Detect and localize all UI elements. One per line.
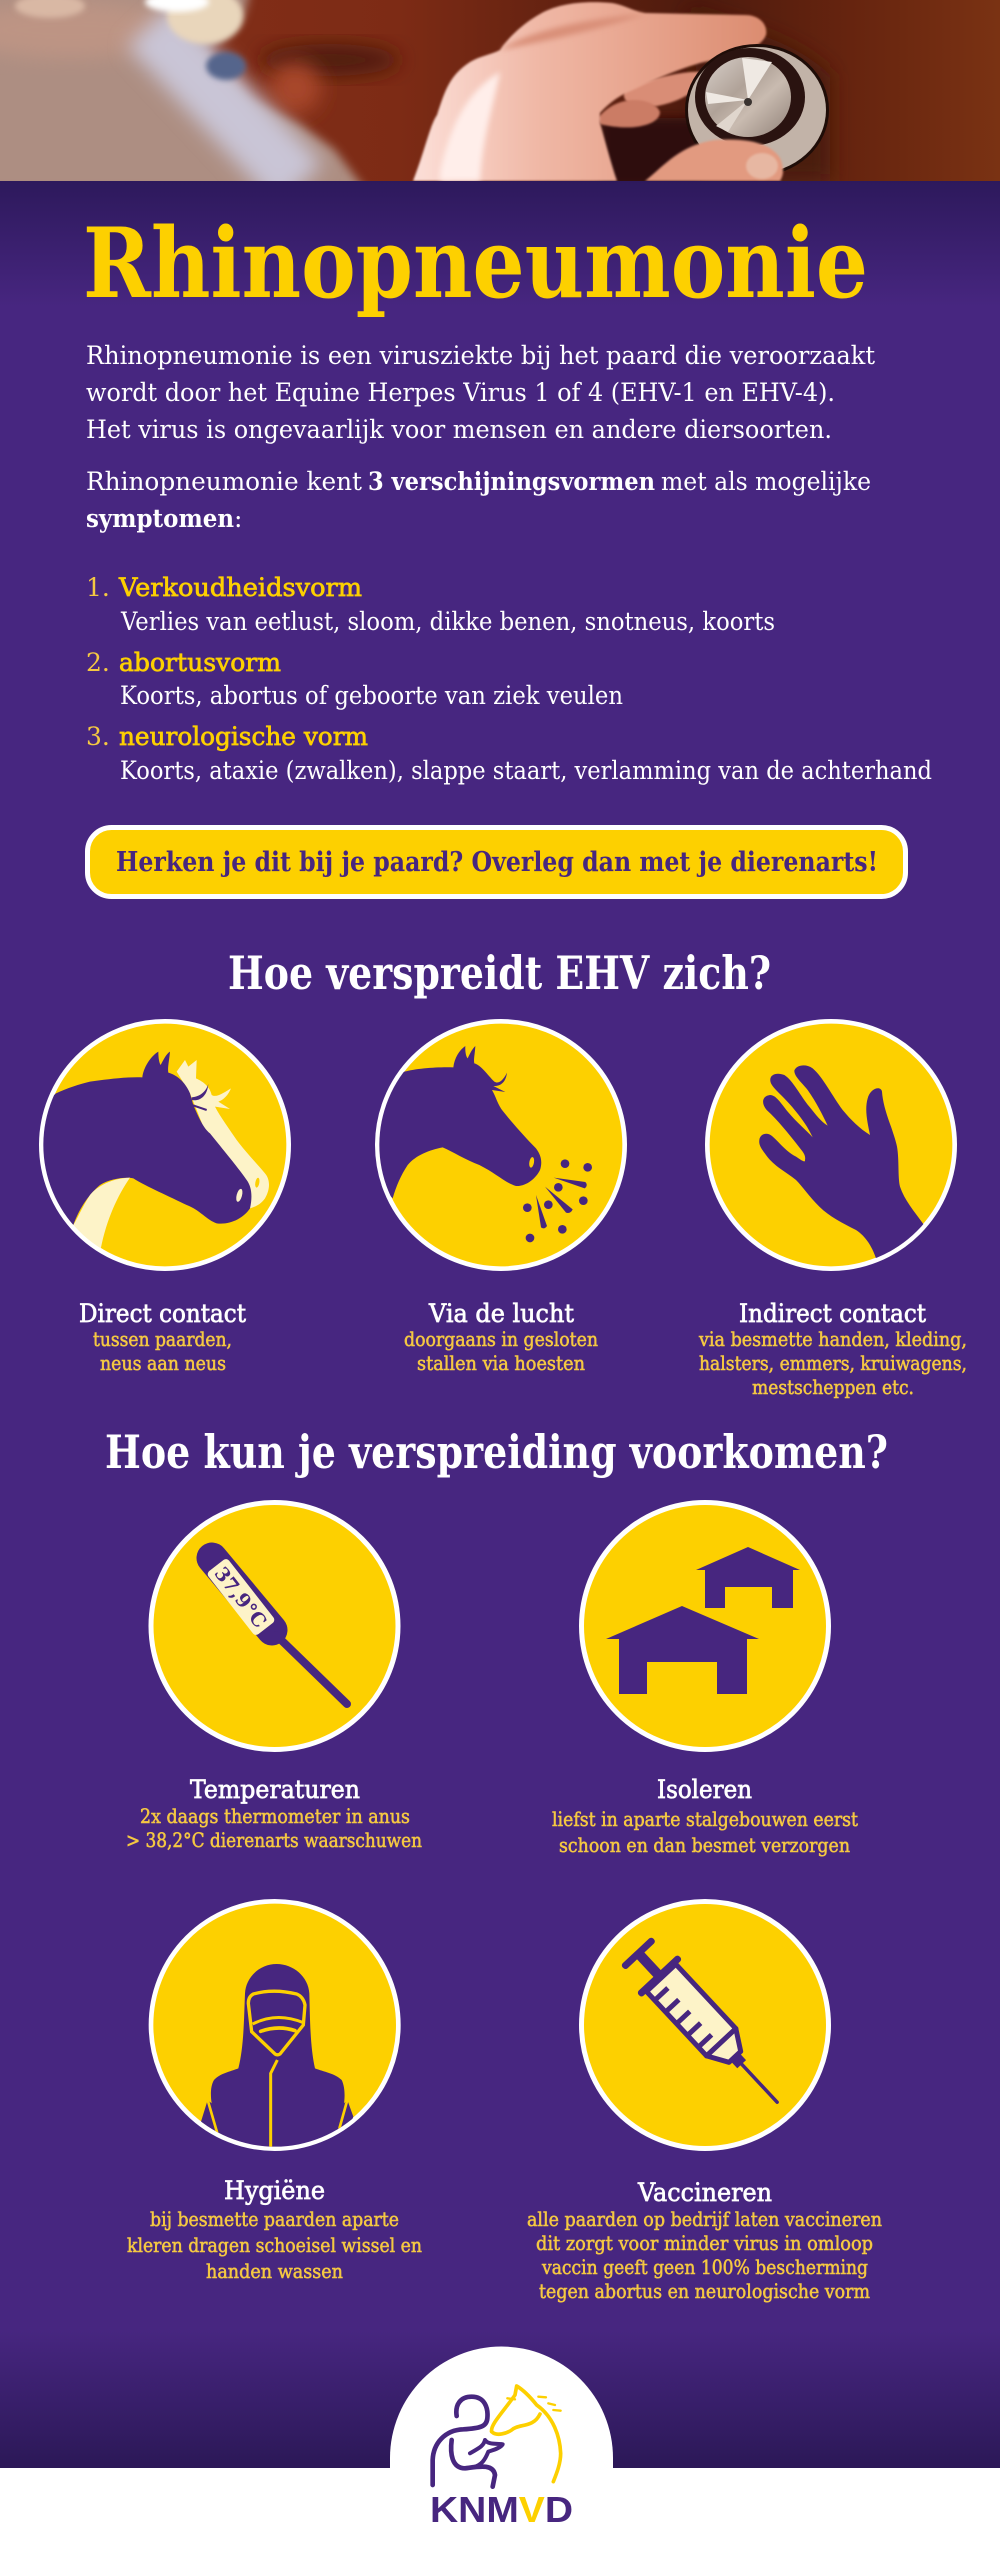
symptoms intro: symptomen [86,504,234,533]
text: vaccineren: vaccin geeft geen 100% bescherming [541,2256,868,2279]
form 3: neurologische vorm [119,722,368,751]
logo wordmark: KNMVD [430,2489,573,2530]
text: direct contact: neus aan neus [100,1352,226,1375]
callout button [88,828,906,896]
text: vaccineren: Vaccineren [637,2178,772,2207]
text: temperaturen [126,1775,422,1852]
text: hygiene: Hygiëne [224,2176,325,2205]
intro paragraph [86,341,875,444]
symptoms intro: Rhinopneumonie kent [86,467,362,496]
symptoms intro: met als mogelijke [661,467,871,496]
symptoms intro: : [234,504,242,533]
form 1: 1. [86,573,110,602]
text: via de lucht [404,1299,598,1375]
text: indirect contact: halsters, emmers, kruiwagens, [699,1352,967,1375]
form 2: abortusvorm [119,648,281,677]
text: direct contact [79,1299,246,1375]
text: hygiene: kleren dragen schoeisel wissel en [127,2234,422,2257]
form 3 [86,722,932,785]
text: temperaturen: Temperaturen [190,1775,360,1804]
form 3: 3. [86,722,110,751]
text: isoleren [552,1775,858,1857]
photo: hand with stethoscope on horse [0,0,1000,190]
form 2: Koorts, abortus of geboorte van ziek veulen [120,681,623,710]
text: indirect contact: Indirect contact [739,1299,926,1328]
logo mark: person and horse [433,2386,561,2487]
list: three forms [86,573,932,785]
footer logo badge [390,2346,613,2469]
text: indirect contact: mestscheppen etc. [752,1376,914,1399]
text: direct contact: tussen paarden, [93,1328,232,1351]
icon: barns [582,1502,828,1750]
form 1: Verkoudheidsvorm [118,573,362,602]
heading: spread: Hoe verspreidt EHV zich? [228,946,771,1000]
text: vaccineren: dit zorgt voor minder virus in omloop [536,2232,873,2255]
icon: protective suit [151,1901,398,2153]
form 3: Koorts, ataxie (zwalken), slappe staart, verlamming van de achterhand [120,756,932,785]
title: Rhinopneumonie [83,207,868,320]
symptoms intro: 3 verschijningsvormen [368,467,655,496]
callout button: Herken je dit bij je paard? Overleg dan met je dierenarts! [116,847,878,878]
text: isoleren: liefst in aparte stalgebouwen eerst [552,1808,858,1831]
logo: KNMVD [430,2386,573,2530]
hand [413,2,766,181]
icon: syringe [582,1902,828,2148]
intro paragraph: Rhinopneumonie is een virusziekte bij het paard die veroorzaakt [86,341,875,370]
text: vaccineren: tegen abortus en neurologische vorm [539,2280,870,2303]
text: via de lucht: doorgaans in gesloten [404,1328,598,1351]
form 2: 2. [86,648,110,677]
text: vaccineren [527,2178,882,2303]
intro paragraph: Het virus is ongevaarlijk voor mensen en andere diersoorten. [86,415,832,444]
text: isoleren: Isoleren [657,1775,752,1804]
text: via de lucht: stallen via hoesten [417,1352,585,1375]
text: vaccineren: alle paarden op bedrijf laten vaccineren [527,2208,882,2231]
icon: thermometer: 37,9°C [210,1563,271,1632]
text: temperaturen: > 38,2°C dierenarts waarschuwen [126,1829,422,1852]
text: via de lucht: Via de lucht [428,1299,574,1328]
curled fingers [624,72,700,108]
text: indirect contact: via besmette handen, kleding, [698,1328,967,1351]
icon: direct contact horse [37,1021,289,1269]
form 1 [86,573,775,636]
symptoms intro [86,467,871,533]
text: hygiene: bij besmette paarden aparte [150,2208,399,2231]
icon: thermometer [151,1502,398,1750]
form 1: Verlies van eetlust, sloom, dikke benen, snotneus, koorts [120,607,775,636]
icon: airborne horse [373,1021,625,1269]
form 2 [86,648,623,710]
intro paragraph: wordt door het Equine Herpes Virus 1 of 4 (EHV-1 en EHV-4). [86,378,835,407]
text: direct contact: Direct contact [79,1299,246,1328]
text: indirect contact [698,1299,967,1399]
icon: hand [707,1021,955,1269]
text: isoleren: schoon en dan besmet verzorgen [559,1834,850,1857]
text: hygiene: handen wassen [206,2260,343,2283]
text: hygiene [127,2176,422,2283]
text: temperaturen: 2x daags thermometer in anus [140,1805,410,1828]
